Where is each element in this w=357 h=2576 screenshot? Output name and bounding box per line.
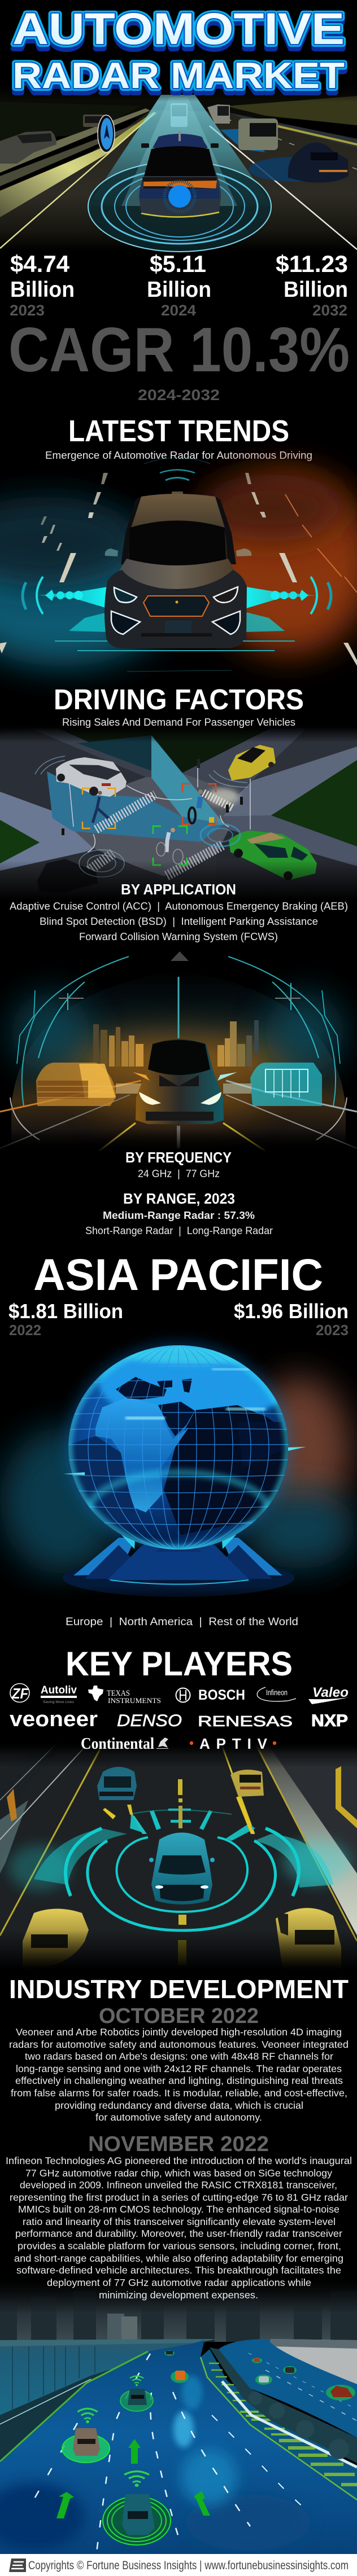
left wall [0, 2339, 216, 2415]
logo: Autoliv: Autoliv [41, 1684, 77, 1696]
market size stat 2032: Billion [284, 278, 348, 302]
development: November 2022: representing the first product in a series of cutting-edge 76 to 81 GHz radar [10, 2192, 348, 2203]
development: November 2022: software-defined vehicle architectures. This breakthrough facilitates the [16, 2265, 341, 2276]
logo: Infineon [257, 1687, 296, 1701]
market size stat 2032 [276, 251, 348, 319]
green car [229, 831, 317, 880]
logo: Aptiv: APTIV [199, 1735, 268, 1752]
radar arcs [35, 756, 247, 877]
development: November 2022: developed in 2009. Infineon unveiled the RASIC CTRX8181 transceiver, [20, 2179, 337, 2191]
left side lanes [0, 1741, 68, 1817]
logo: ZF: ZF [11, 1685, 29, 1702]
key player logos [10, 1684, 349, 1753]
development: October 2022: from false alarms for safer roads. It is modular, reliable, and cost-effective, [11, 2087, 347, 2099]
development: November 2022: performance and durability. Moreover, the user-friendly radar transceiver [15, 2228, 342, 2239]
yellow car [228, 745, 276, 780]
development: November 2022: and short-range capabilities, while also offering adaptability for emerging [14, 2253, 343, 2264]
car front view [105, 491, 251, 648]
logo: Autoliv [41, 1684, 77, 1704]
city skyline [93, 1020, 259, 1067]
radar waves: left [23, 577, 107, 632]
logo: Valeo: Valeo [312, 1685, 349, 1700]
yellow car bottom left [23, 1908, 89, 1969]
logo: Autoliv: Saving More Lives [43, 1701, 74, 1704]
radar beam and rings [88, 95, 272, 252]
logo: Bosch [176, 1687, 245, 1703]
development: October 2022: effectively in challenging weather and lighting, distinguishing real threats [15, 2075, 343, 2086]
vehicles ahead and beside [0, 103, 349, 183]
development: October 2022: Veoneer and Arbe Robotics jointly developed high-resolution 4D imaging [16, 2026, 342, 2038]
illustration: radar dome over cars and city [0, 951, 357, 1152]
market size stat 2024: $5.11 [150, 251, 206, 277]
subheading: latest trends: Emergence of Automotive Radar for Autonomous Driving [45, 450, 312, 461]
yellow car top right [230, 1770, 264, 1797]
segment: by application: Adaptive Cruise Control (ACC) | Autonomous Emergency Braking (AEB) [10, 901, 348, 912]
CAGR callout: 2024-2032 [138, 387, 220, 403]
road dashes [0, 473, 357, 666]
illustration: road with radar rings around car [0, 1741, 357, 1969]
segment: by frequency [125, 1149, 232, 1179]
dark car [37, 859, 98, 888]
development: October 2022: for automotive safety and autonomy. [95, 2112, 262, 2123]
market size stat 2023: $4.74 [10, 251, 70, 277]
regional stat 2022 [8, 1300, 123, 1339]
logo: Texas Instruments [88, 1686, 161, 1705]
title: AUTOMOTIVE [12, 3, 345, 54]
far cars [164, 2350, 355, 2401]
market size stat 2023 [10, 251, 75, 319]
left shoulder [0, 2339, 216, 2461]
car with radar rings: front [103, 2494, 171, 2545]
left barrier [7, 1789, 17, 1822]
logo: Renesas: RENESAS [198, 1713, 293, 1730]
city skyline [0, 2288, 357, 2342]
segment: by range [85, 1190, 273, 1236]
development: October 2022: providing redundancy and diverse data, which is crucial [55, 2100, 303, 2111]
icon: wifi brown [77, 2408, 98, 2423]
Europe and Arabia dark land [116, 1377, 282, 1467]
market size stat 2032: 2032 [312, 302, 347, 319]
icon: Fortune Business Insights logo [9, 2559, 26, 2572]
arrows [56, 2439, 210, 2518]
illustration: glowing globe on pedestal [0, 1341, 357, 1605]
street curbs and poles [62, 759, 250, 852]
segment: by application [10, 881, 348, 942]
regional stat 2023: 2023 [316, 1322, 349, 1339]
illustration: connected highway with city [0, 2280, 357, 2554]
development: November 2022: Infineon Technologies AG pioneered the introduction of the world's inaugural [6, 2155, 352, 2166]
right barrier [336, 1766, 357, 1828]
heading: driving factors: DRIVING FACTORS [54, 683, 304, 716]
detection brackets and road users [82, 784, 216, 865]
crosswalks [79, 793, 233, 877]
radar detection cones [47, 735, 224, 842]
grid lines [68, 1345, 289, 1550]
development: November 2022: minimizing development expenses. [99, 2289, 258, 2301]
title: RADAR MARKET [12, 55, 345, 96]
car with radar rings: dark [120, 2389, 153, 2411]
orbit flares [288, 1447, 306, 1451]
segment: by range: Short-Range Radar | Long-Range Radar [85, 1225, 273, 1236]
main road [0, 2340, 357, 2554]
teal car upper left [97, 1767, 137, 1800]
segment: by frequency: 24 GHz | 77 GHz [138, 1168, 220, 1179]
logo: Continental: Continental [81, 1735, 154, 1753]
heading: key players: KEY PLAYERS [66, 1645, 293, 1683]
segment: by range: BY RANGE, 2023 [123, 1190, 235, 1207]
icon: top radar arcs [144, 458, 210, 480]
title: RADAR MARKET [12, 59, 345, 100]
market size stat 2023: Billion [10, 278, 75, 302]
radar waves: right [246, 577, 331, 632]
icon: wifi dark [130, 2376, 143, 2386]
radar rings [66, 1828, 299, 1930]
development: November 2022: ratio and linearity of this transceiver significantly elevate system-level [23, 2216, 336, 2227]
development: October 2022: radars for automotive safety and autonomous features. Veoneer integrated [9, 2039, 349, 2050]
development: November 2022: NOVEMBER 2022 [88, 2132, 269, 2156]
logo: NXP: NXP [311, 1712, 348, 1730]
regional stat 2023 [234, 1300, 349, 1339]
dome outlines [10, 956, 347, 1140]
title: AUTOMOTIVE [12, 8, 345, 58]
radar car rear view [139, 131, 221, 218]
wireframe car: orange [36, 1063, 144, 1106]
radar fans [8, 1809, 350, 1890]
title: RADAR MARKET [12, 55, 345, 96]
title [12, 3, 345, 100]
market size stat 2023: 2023 [10, 302, 45, 319]
car with radar rings: brown [62, 2428, 110, 2463]
heading: latest trends: LATEST TRENDS [68, 414, 289, 448]
title: AUTOMOTIVE [12, 3, 345, 54]
development: October 2022: long-range sensing and one with 24x12 RF channels. The radar operates [16, 2063, 342, 2074]
Africa [95, 1397, 189, 1512]
icon: wifi front [124, 2472, 149, 2487]
white SUV [56, 757, 127, 797]
logo: Veoneer: veoneer [10, 1708, 98, 1731]
center road dashes [103, 1779, 254, 1965]
regional stat 2022: $1.81 Billion [8, 1300, 123, 1323]
illustration: intersection with radar detection [0, 727, 357, 904]
median white strip and hedge [210, 2347, 357, 2467]
heading: industry development: INDUSTRY DEVELOPMENT [9, 1974, 349, 2004]
teal radar car [149, 1833, 215, 1904]
development: October 2022: two radars based on Arbe's designs: one with 48x48 RF channels for [25, 2051, 333, 2062]
market size stat 2024: Billion [147, 278, 211, 302]
globe sphere [68, 1342, 291, 1552]
market size stat 2024 [147, 251, 211, 319]
yellow car bottom right [276, 1908, 341, 1969]
heading: asia pacific: ASIA PACIFIC [33, 1249, 323, 1300]
logo: Denso: DENSO [117, 1712, 182, 1730]
subheading: driving factors: Rising Sales And Demand For Passenger Vehicles [62, 717, 295, 728]
footer bar [0, 2554, 357, 2576]
logo: Infineon: Infineon [266, 1688, 288, 1697]
pedestal [63, 1524, 294, 1597]
hero illustration: highway with radar car [0, 85, 357, 252]
segment: by application: BY APPLICATION [121, 881, 236, 898]
dark Asia and ocean [164, 1405, 291, 1535]
top triangle marker [171, 951, 189, 961]
wireframe car: cyan [223, 1063, 322, 1106]
green edge line [0, 2351, 148, 2461]
hatched strip [201, 2349, 357, 2500]
development: November 2022: deployment of 77 GHz automotive radar applications while [47, 2277, 311, 2288]
development: October 2022: OCTOBER 2022 [99, 2004, 259, 2028]
segment: by frequency: BY FREQUENCY [125, 1149, 232, 1166]
regional stat 2022: 2022 [9, 1322, 41, 1339]
development: October 2022 [9, 2004, 349, 2123]
market size stat 2032: $11.23 [276, 251, 348, 277]
lane dashes [28, 2353, 357, 2552]
development: November 2022 [6, 2132, 352, 2301]
right road [219, 2339, 357, 2438]
logo: Texas Instruments: TEXAS [107, 1689, 130, 1698]
development: November 2022: 77 GHz automotive radar chip, which was based on SiGe technology [25, 2167, 332, 2179]
logo: Bosch: BOSCH [198, 1687, 245, 1703]
regional stat 2023: $1.96 Billion [234, 1300, 349, 1323]
icon: radar sign [98, 115, 115, 152]
market size stat 2024: 2024 [161, 302, 196, 319]
right-hand wall [270, 2339, 357, 2385]
regions list: Europe | North America | Rest of the World [66, 1616, 298, 1628]
development: November 2022: provides a scalable platform for various sensors, including corner, front, [18, 2240, 341, 2252]
right side area and lit pavement band [277, 1757, 357, 1873]
segment: by application: Blind Spot Detection (BSD) | Intelligent Parking Assistance [40, 916, 318, 927]
segment: by range: Medium-Range Radar : 57.3% [103, 1210, 255, 1221]
road lines [0, 1081, 357, 1151]
central car rear view [133, 1039, 237, 1124]
segment: by application: Forward Collision Warning System (FCWS) [79, 931, 278, 942]
rim glow [69, 1346, 288, 1548]
illustration: front car with radar waves [0, 458, 357, 672]
logo: Texas Instruments: INSTRUMENTS [108, 1696, 161, 1705]
development: November 2022: MMICs built on 28-nm CMOS technology. The enhanced signal-to-noise [18, 2204, 339, 2215]
